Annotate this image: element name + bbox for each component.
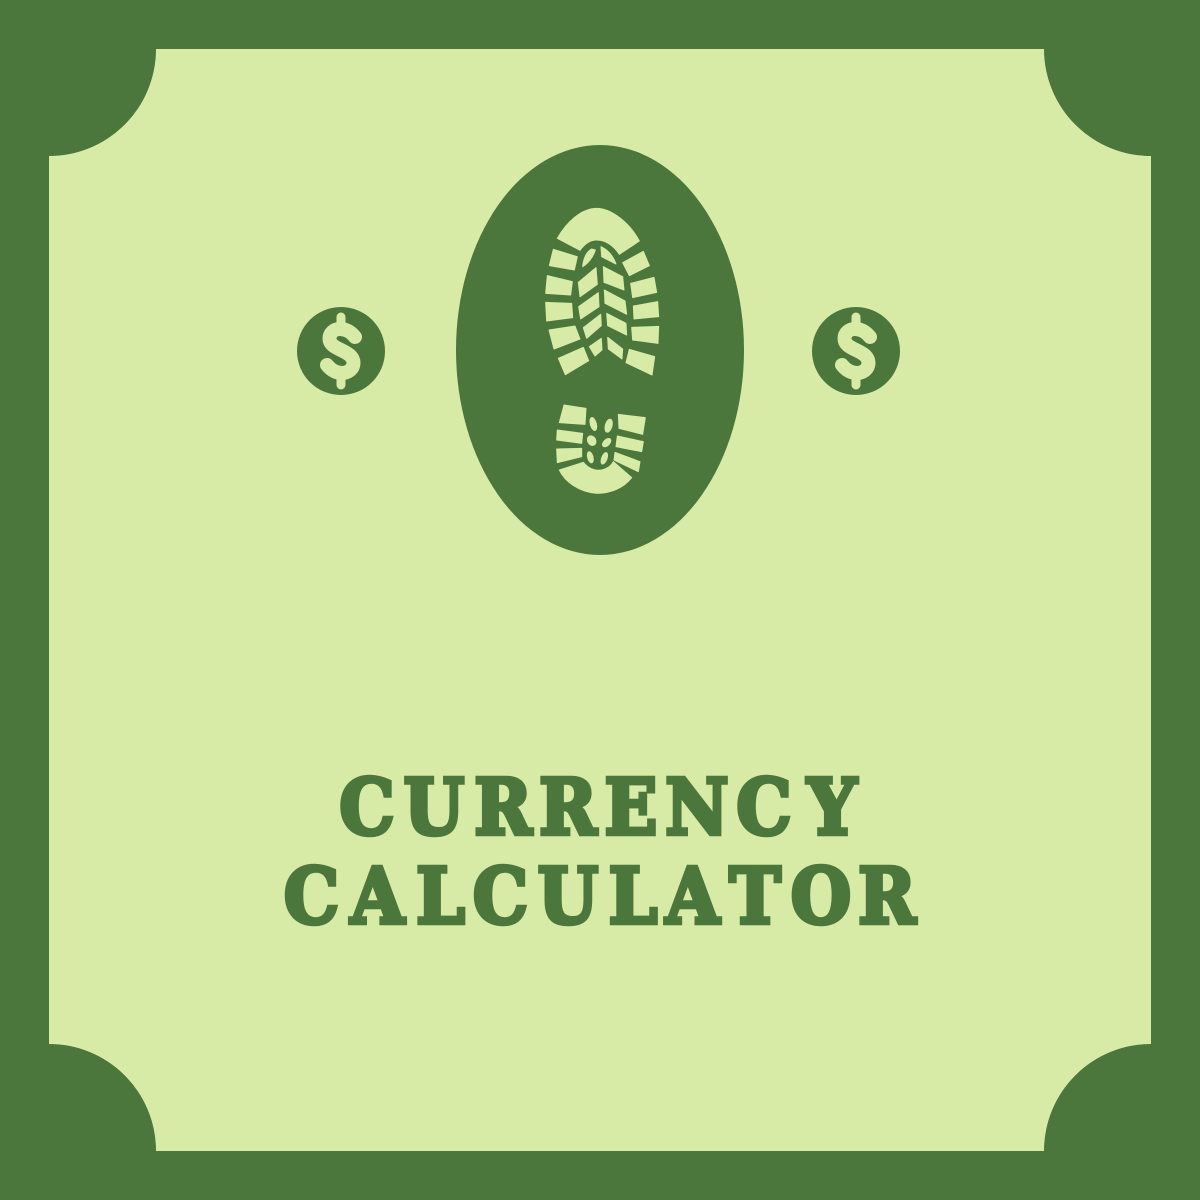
title: CURRENCY (339, 762, 857, 853)
icon: dollar coin right (812, 307, 900, 395)
icon: boot print heel (557, 405, 645, 493)
icon: dollar coin left (297, 307, 385, 395)
icon: oval medallion (456, 145, 744, 555)
title: CALCULATOR (284, 851, 917, 942)
title (284, 762, 917, 942)
icon: boot print sole (546, 208, 659, 375)
